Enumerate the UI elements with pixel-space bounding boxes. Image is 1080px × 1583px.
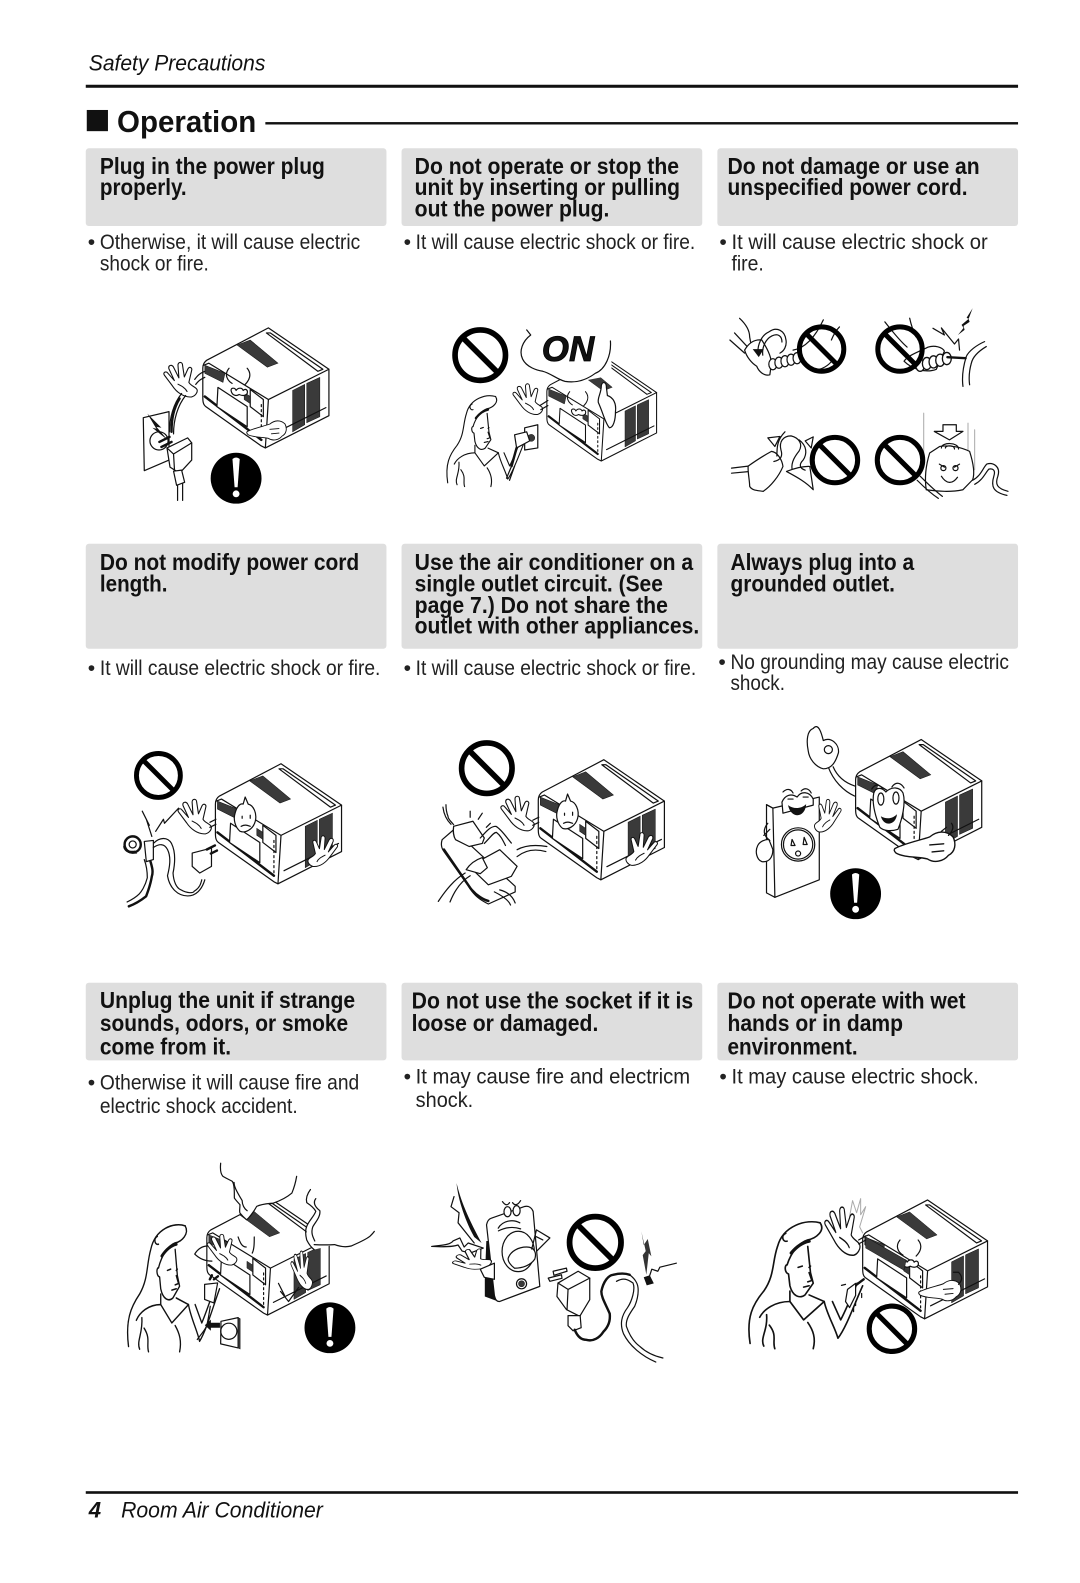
warning text — [88, 1072, 359, 1118]
illustration: four cord misuse scenes — [730, 308, 1008, 498]
panel: always plug into grounded outlet — [717, 544, 1018, 919]
heading box: hands or in damp — [727, 1010, 903, 1036]
warning text: It may cause electric shock. — [732, 1066, 979, 1089]
panel: plug in the power plug — [86, 148, 386, 504]
warning text: Otherwise, it will cause electric — [100, 231, 361, 254]
heading box: properly. — [100, 174, 187, 200]
footer: page number and title: 4 — [88, 1497, 101, 1522]
illustration: smiling outlet and air conditioner — [756, 727, 982, 919]
heading box — [86, 983, 386, 1060]
heading box: come from it. — [100, 1033, 231, 1059]
scene: pulling cord with spark — [878, 308, 986, 386]
heading box — [402, 544, 702, 649]
heading box — [717, 148, 1018, 226]
heading box — [402, 983, 702, 1060]
warning text: shock. — [730, 672, 785, 695]
warning text: • — [719, 1066, 727, 1089]
illustration: air conditioner and loose plug — [143, 328, 329, 504]
illustration: woman unplugging smoking air conditioner — [128, 1163, 374, 1353]
panel: unplug if strange sounds — [86, 983, 386, 1353]
warning text: shock. — [416, 1089, 473, 1112]
heading box: Do not use the socket if it is — [412, 987, 693, 1013]
warning text: • — [404, 231, 411, 254]
warning text: No grounding may cause electric — [730, 651, 1009, 674]
heading box: unit by inserting or pulling — [415, 174, 680, 200]
footer: page number and title: Room Air Conditioner — [121, 1497, 324, 1522]
panel: do not operate by pulling the plug — [402, 148, 702, 487]
footer rule — [86, 1491, 1018, 1494]
panel: do not damage the power cord — [717, 148, 1018, 498]
illustration: woman with wet hand and air conditioner — [749, 1199, 988, 1351]
heading box: Use the air conditioner on a — [415, 549, 694, 575]
heading box: grounded outlet. — [730, 571, 895, 597]
heading box — [86, 148, 386, 226]
warning text — [88, 231, 361, 275]
heading box: environment. — [727, 1033, 858, 1059]
panel: single outlet circuit — [402, 544, 702, 905]
warning text — [719, 231, 988, 275]
heading: Operation: Operation — [117, 106, 256, 139]
illustration: woman, air conditioner and ON bubble — [447, 329, 657, 487]
warning text: It will cause electric shock or fire. — [100, 657, 380, 680]
warning text: • — [719, 231, 727, 254]
warning text: • — [718, 651, 726, 674]
heading box: page 7.) Do not share the — [415, 592, 668, 618]
panel: do not modify cord length — [86, 544, 386, 906]
heading box: sounds, odors, or smoke — [100, 1010, 348, 1036]
heading box: out the power plug. — [415, 195, 609, 221]
warning text: It will cause electric shock or fire. — [416, 231, 695, 254]
illustration: overloaded power strip and air conditioner — [438, 743, 664, 905]
heading box: unspecified power cord. — [727, 174, 968, 200]
panel: do not use loose socket — [402, 983, 702, 1362]
warning text — [404, 1066, 690, 1112]
speech bubble word: ON: ON — [542, 330, 596, 369]
scene: twisting cord — [730, 318, 844, 375]
heading box — [402, 148, 702, 226]
panel: do not operate with wet hands — [717, 983, 1018, 1351]
heading box: loose or damaged. — [412, 1010, 598, 1036]
heading box: Do not operate or stop the — [415, 153, 679, 179]
scene: bending cord — [732, 432, 858, 491]
heading box — [717, 983, 1018, 1060]
heading box: length. — [100, 571, 167, 597]
warning text: • — [88, 657, 95, 680]
header rule — [86, 85, 1018, 88]
warning text — [718, 651, 1009, 695]
heading box: Unplug the unit if strange — [100, 987, 355, 1013]
heading: Operation — [87, 106, 1018, 139]
warning text: It will cause electric shock or fire. — [416, 657, 696, 680]
warning text: • — [88, 1072, 95, 1095]
warning text: electric shock accident. — [100, 1095, 298, 1118]
heading box: Always plug into a — [730, 549, 915, 575]
section label: Safety Precautions: Safety Precautions — [89, 51, 265, 76]
warning text: fire. — [732, 252, 764, 275]
warning text: • — [88, 231, 95, 254]
warning text: It will cause electric shock or — [732, 231, 988, 254]
heading box: Plug in the power plug — [100, 153, 325, 179]
illustration: modified cord and air conditioner — [123, 754, 342, 906]
warning text: Otherwise it will cause fire and — [100, 1072, 359, 1095]
heading box: Do not operate with wet — [727, 987, 966, 1013]
heading box: single outlet circuit. (See — [415, 571, 663, 597]
warning text: shock or fire. — [100, 252, 209, 275]
warning text: • — [404, 1066, 411, 1089]
illustration: damaged socket and plug — [432, 1183, 676, 1362]
heading box — [86, 544, 386, 649]
heading box — [717, 544, 1018, 649]
heading box: Do not damage or use an — [727, 153, 980, 179]
heading box: Do not modify power cord — [100, 549, 359, 575]
warning text: It may cause fire and electricm — [416, 1066, 690, 1089]
heading box: outlet with other appliances. — [415, 613, 699, 639]
scene: heavy object on cord — [877, 413, 1008, 498]
warning text: • — [404, 657, 411, 680]
